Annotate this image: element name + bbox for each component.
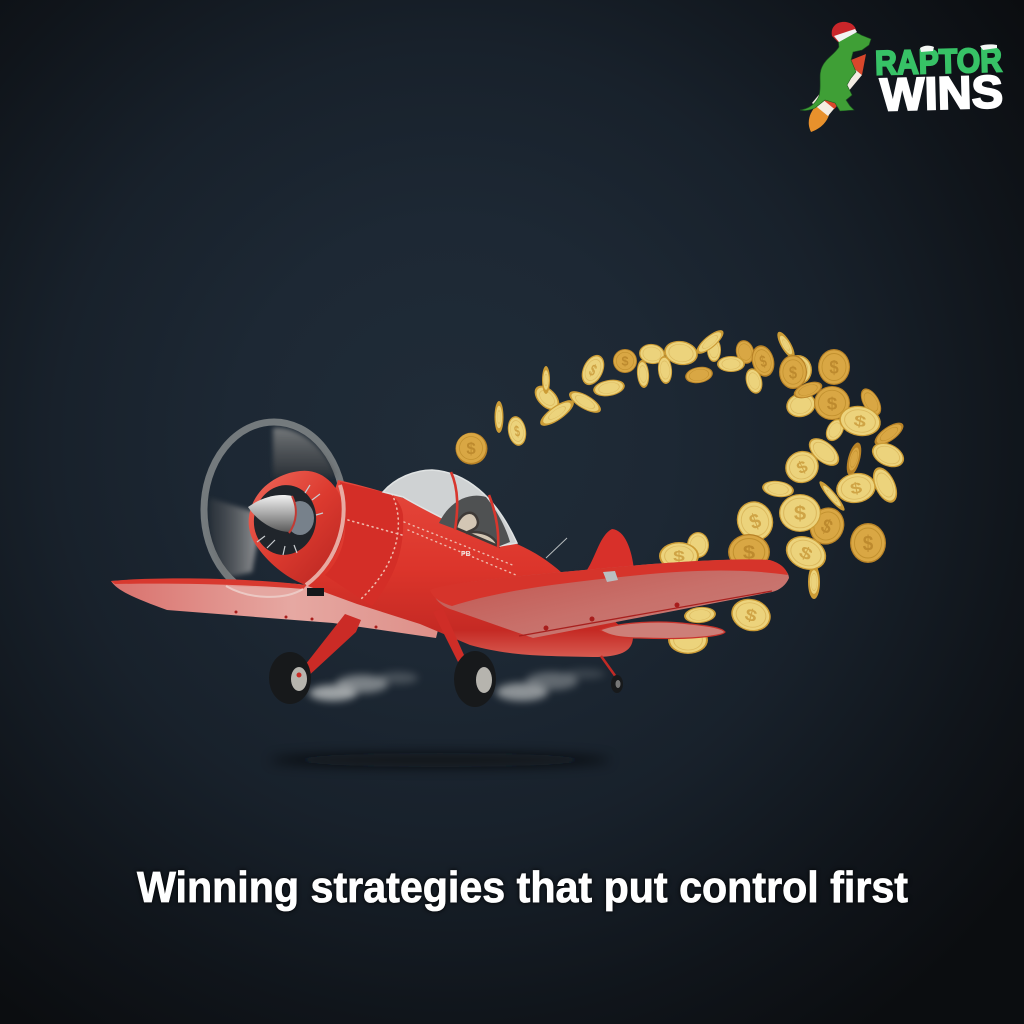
santa hat	[832, 22, 857, 42]
coin trail: $	[466, 439, 476, 458]
spinner	[248, 495, 296, 533]
propeller disc	[204, 422, 344, 598]
smoke trails	[309, 669, 605, 701]
coin trail: $	[586, 360, 600, 380]
coin trail: $	[673, 548, 685, 564]
near wing	[430, 559, 789, 638]
coin trail: $	[863, 533, 873, 556]
coin trail: $	[621, 354, 629, 368]
left landing gear	[269, 614, 361, 704]
fuselage: PB	[461, 551, 471, 558]
rocket	[809, 54, 866, 132]
coin trail	[455, 326, 908, 654]
fin	[587, 529, 634, 570]
canopy and pilot	[383, 470, 517, 548]
coin trail: $	[793, 456, 811, 478]
coin trail: $	[829, 357, 839, 378]
coin trail: $	[789, 363, 797, 383]
ground shadow	[270, 753, 610, 767]
coin trail: $	[796, 543, 815, 565]
cowling	[248, 471, 345, 585]
coin trail: $	[746, 509, 764, 535]
far wing	[111, 578, 440, 638]
logo: Raptor Wins	[800, 22, 1004, 132]
title: Winning strategies that put control first	[137, 863, 908, 912]
fuselage	[305, 480, 633, 657]
tail wheel	[601, 656, 623, 693]
coin trail: $	[743, 542, 756, 563]
WINS wordmark: WINS	[879, 65, 1004, 121]
coin trail: $	[743, 606, 759, 627]
coin trail: $	[827, 393, 837, 413]
right landing gear	[433, 608, 496, 707]
coin trail: $	[852, 412, 868, 432]
dinosaur	[800, 32, 871, 111]
antenna	[546, 538, 567, 558]
coin trail: $	[817, 515, 836, 539]
coin trail: $	[758, 352, 769, 372]
RAPTOR wordmark: RAPTOR	[875, 41, 1003, 83]
coin trail: $	[513, 422, 522, 441]
horizontal stabiliser	[600, 622, 725, 639]
coin trail: $	[849, 478, 864, 498]
coin trail: $	[794, 503, 806, 525]
snow on wordmark	[920, 44, 997, 52]
